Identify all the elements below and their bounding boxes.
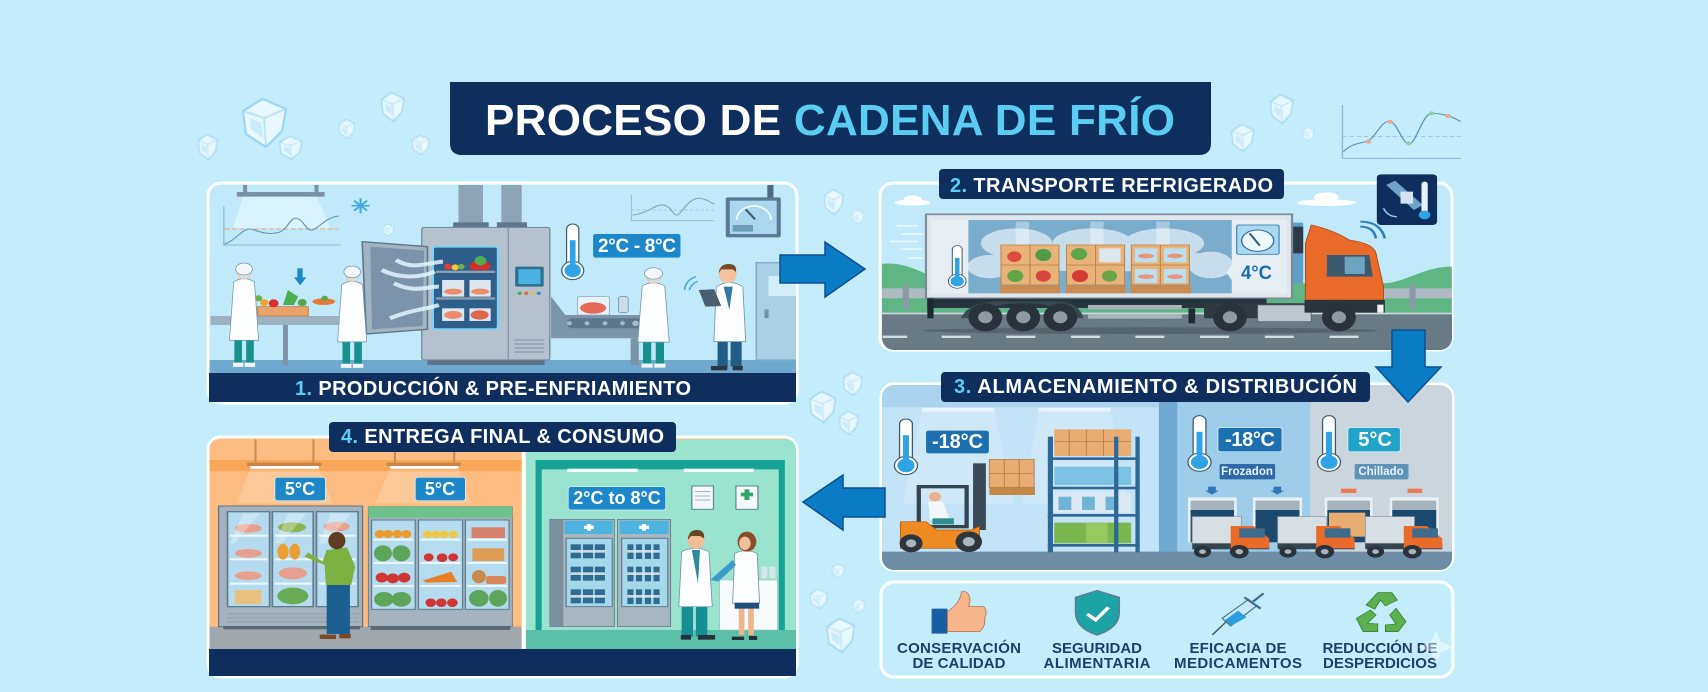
benefit: eficacia de medicamentos — [1174, 640, 1302, 672]
temperature value 4°C: 4°C — [1241, 263, 1272, 284]
chart: top right temperature curve — [1342, 105, 1461, 158]
icon: shield — [1076, 591, 1119, 635]
panel 2: transporte refrigerado — [880, 169, 1453, 351]
benefit: seguridad alimentaria — [1044, 640, 1151, 672]
panel 1 heading: 1. PRODUCCIÓN & PRE-ENFRIAMIENTO — [295, 376, 691, 400]
sparkle watermark — [1418, 630, 1454, 664]
benefit: conservación de calidad: DE CALIDAD — [912, 655, 1006, 672]
benefit: reducción de desperdicios: REDUCCIÓN DE — [1322, 639, 1438, 657]
benefit: conservación de calidad — [897, 639, 1021, 672]
benefit: eficacia de medicamentos: EFICACIA DE — [1190, 640, 1286, 657]
benefit: seguridad alimentaria: SEGURIDAD — [1052, 640, 1142, 657]
arrow: step 2 to step 3 — [1376, 330, 1441, 402]
label Chillado: Chillado — [1358, 466, 1404, 478]
label 5°C left fridge: 5°C — [285, 479, 315, 499]
arrow: step 1 to step 2 — [780, 242, 865, 297]
icon: satellite and thermometer — [1377, 174, 1437, 225]
panel 3 heading: 3. ALMACENAMIENTO & DISTRIBUCIÓN — [954, 374, 1357, 398]
label 2°C to 8°C: 2°C to 8°C — [573, 488, 661, 508]
icon: recycle — [1356, 593, 1406, 632]
panel 3: almacenamiento y distribución — [881, 372, 1454, 572]
icon: syringe — [1212, 593, 1264, 635]
label 5°C: 5°C — [1358, 429, 1392, 451]
temperature label: 2°C - 8°C — [598, 236, 676, 257]
panel 2 heading — [939, 169, 1284, 199]
icon: thumbs up — [932, 591, 986, 634]
title banner — [450, 82, 1211, 155]
benefit: conservación de calidad: CONSERVACIÓN — [897, 639, 1021, 657]
label -18°C loading bay: -18°C — [932, 431, 983, 453]
title banner: PROCESO DE CADENA DE FRÍO — [485, 95, 1175, 145]
panel 4 heading: 4. ENTREGA FINAL & CONSUMO — [341, 426, 664, 448]
arrow: step 3 to step 4 — [803, 475, 885, 530]
label -18°C frozen: -18°C — [1225, 429, 1275, 451]
benefit: eficacia de medicamentos: MEDICAMENTOS — [1174, 655, 1302, 672]
benefit: reducción de desperdicios — [1322, 639, 1438, 672]
panel: beneficios — [881, 582, 1453, 677]
panel 3 heading — [941, 372, 1370, 402]
label Frozadon: Frozadon — [1221, 466, 1273, 478]
decorative ice cubes — [198, 93, 1314, 652]
label 5°C right fridge: 5°C — [425, 479, 455, 499]
benefit: reducción de desperdicios: DESPERDICIOS — [1323, 655, 1437, 672]
panel 1: producción y pre-enfriamiento — [208, 183, 797, 403]
panel 4 heading — [329, 422, 676, 452]
benefit: seguridad alimentaria: ALIMENTARIA — [1044, 655, 1151, 672]
panel 2 heading: 2. TRANSPORTE REFRIGERADO — [950, 175, 1273, 197]
panel 4: entrega final y consumo — [208, 422, 797, 677]
